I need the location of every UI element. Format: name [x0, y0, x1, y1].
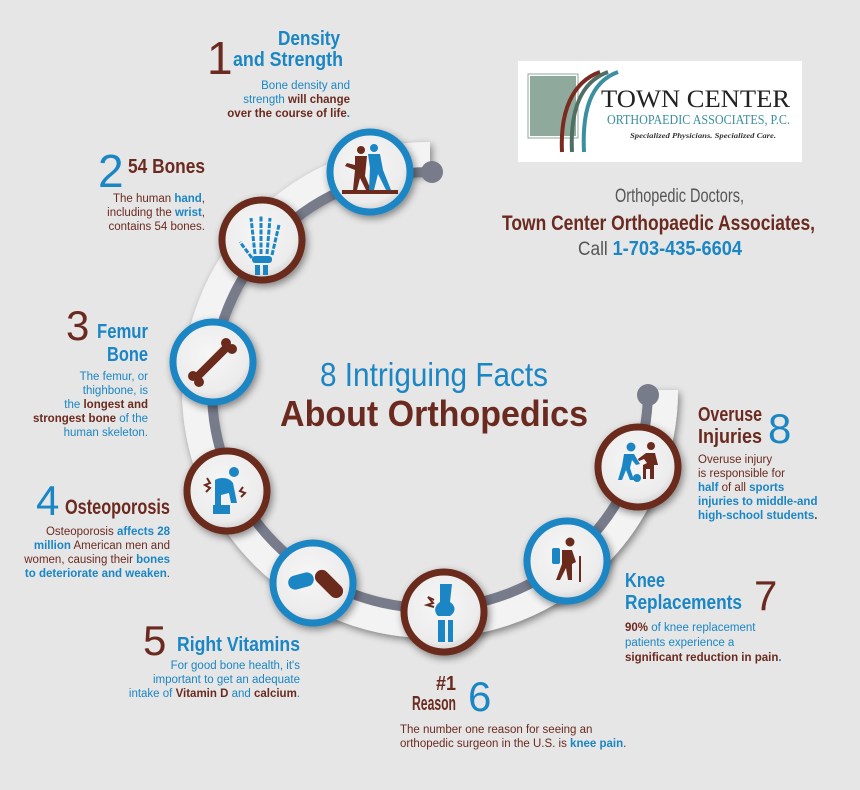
fact 6: Reason	[412, 693, 456, 715]
title	[280, 356, 588, 434]
fact 3: Bone	[107, 344, 148, 366]
contact: Orthopedic Doctors,	[615, 186, 744, 207]
fact 1: and Strength	[233, 49, 343, 71]
fact 8: half of all sports	[698, 482, 784, 494]
fact 8: high-school students.	[698, 510, 817, 522]
circle 6: knee	[404, 572, 484, 652]
fact 1: 1	[207, 32, 233, 84]
circle 3: bone	[173, 322, 253, 402]
fact 2: 54 Bones	[128, 156, 205, 178]
fact 8	[698, 404, 817, 522]
fact 3	[33, 302, 148, 439]
circle 4: back pain	[187, 451, 267, 531]
fact 5	[129, 617, 300, 700]
fact 7	[625, 570, 782, 664]
fact 5: 5	[143, 617, 166, 664]
logo: TOWN CENTER	[601, 86, 790, 113]
fact 7: patients experience a	[625, 637, 735, 649]
title: 8 Intriguing Facts	[320, 356, 548, 393]
title: About Orthopedics	[280, 393, 588, 434]
logo	[518, 61, 802, 162]
fact 6	[400, 673, 626, 750]
circle 8: sports	[598, 427, 678, 507]
fact 2: The human hand,	[113, 193, 205, 205]
fact 4: Osteoporosis	[65, 496, 170, 519]
fact 5: intake of Vitamin D and calcium.	[129, 688, 300, 700]
fact 7: 7	[754, 572, 777, 619]
fact 6: #1	[436, 673, 456, 695]
fact 4: to deteriorate and weaken.	[25, 568, 170, 580]
circle 2: hand	[222, 200, 302, 280]
fact 8: injuries to middle-and	[698, 496, 817, 508]
fact 7: 90% of knee replacement	[625, 622, 756, 634]
fact 2: contains 54 bones.	[108, 221, 205, 233]
contact: Call 1-703-435-6604	[578, 238, 743, 260]
fact 3: 3	[66, 302, 89, 349]
fact 2: 2	[98, 145, 124, 197]
fact 4: Osteoporosis affects 28	[46, 526, 171, 538]
logo: ORTHOPAEDIC ASSOCIATES, P.C.	[607, 112, 790, 127]
fact 6: 6	[468, 673, 491, 720]
circle 7: hiker	[527, 521, 607, 601]
fact 4: 4	[36, 477, 59, 524]
fact 3: the longest and	[64, 399, 148, 411]
fact 8: Injuries	[698, 426, 762, 448]
fact 4	[23, 477, 171, 580]
fact 2	[98, 145, 205, 233]
fact 8: Overuse injury	[698, 454, 772, 466]
circle 1: tai chi	[330, 132, 410, 212]
fact 5: Right Vitamins	[177, 634, 300, 656]
fact 1: over the course of life.	[227, 108, 350, 120]
fact 6: orthopedic surgeon in the U.S. is knee pain.	[400, 738, 626, 750]
fact 5: For good bone health, it's	[171, 660, 300, 672]
fact 7: Replacements	[625, 592, 742, 614]
fact 3: The femur, or	[80, 371, 148, 383]
fact 3: Femur	[97, 321, 148, 343]
contact	[502, 186, 815, 260]
fact 8: Overuse	[698, 404, 762, 426]
fact 4: million American men and	[34, 540, 170, 552]
fact 6: The number one reason for seeing an	[400, 724, 592, 736]
fact 4: women, causing their bones	[23, 554, 170, 566]
fact 7: significant reduction in pain.	[625, 652, 782, 664]
fact 3: human skeleton.	[64, 427, 148, 439]
fact 5: important to get an adequate	[153, 674, 300, 686]
fact 8: is responsible for	[698, 468, 785, 480]
fact 7: Knee	[625, 570, 665, 592]
fact 2: including the wrist,	[107, 207, 205, 219]
fact 1: strength will change	[243, 94, 350, 106]
fact 1: Density	[278, 28, 341, 50]
fact 1	[207, 28, 350, 120]
fact 3: strongest bone of the	[33, 413, 148, 425]
logo: Specialized Physicians. Specialized Care.	[630, 131, 776, 140]
fact 1: Bone density and	[261, 80, 350, 92]
fact 8: 8	[768, 405, 791, 452]
arc band	[198, 158, 662, 622]
fact 3: thighbone, is	[83, 385, 148, 397]
circle 5: pills	[273, 543, 353, 623]
